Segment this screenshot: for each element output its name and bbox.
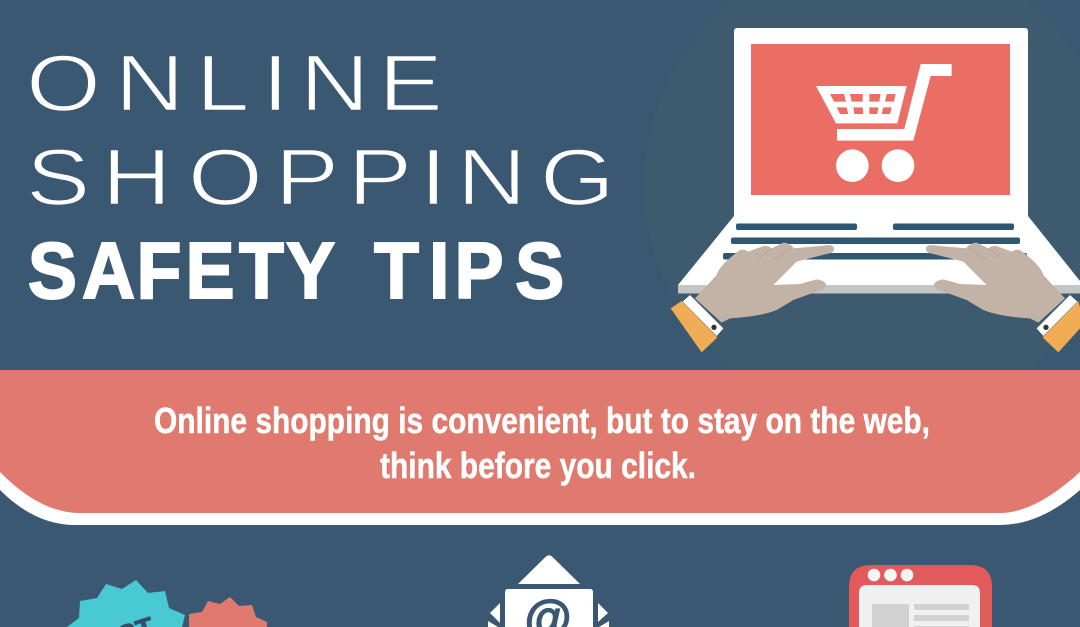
- laptop screen: [751, 44, 1010, 195]
- banner coral fill: [0, 370, 1080, 513]
- icon: badges: [67, 580, 267, 627]
- envelope flap: [518, 555, 580, 584]
- browser buttons: [868, 569, 913, 581]
- keyboard keys: [723, 224, 1027, 260]
- coral badge: [189, 597, 267, 627]
- teal badge: [67, 580, 185, 627]
- title: [26, 38, 615, 316]
- banner line 1: Online shopping is convenient, but to stay on the web,: [154, 400, 930, 441]
- laptop lid: [734, 28, 1028, 218]
- laptop keyboard deck: [678, 216, 1080, 293]
- title line: SAFETY TIPS: SAFETY TIPS: [28, 226, 564, 316]
- laptop front edge: [678, 285, 1080, 294]
- banner: [0, 370, 1080, 525]
- banner white outline: [0, 370, 1080, 525]
- laptop illustration: [644, 0, 1080, 421]
- envelope letter: [505, 589, 593, 627]
- backdrop circle: [644, 0, 1080, 421]
- banner line 2: think before you click.: [380, 445, 696, 486]
- banner message: [154, 400, 930, 486]
- right hand with cuff: [926, 243, 1080, 352]
- browser frame: [849, 565, 992, 627]
- icon: email envelope: [488, 555, 609, 627]
- envelope side folds: [488, 603, 609, 627]
- icon: shopping cart: [816, 64, 952, 182]
- title line: ONLINE: ONLINE: [26, 38, 443, 128]
- page image placeholder: [872, 604, 909, 627]
- icon: browser window: [849, 565, 992, 627]
- left hand with cuff: [671, 243, 834, 352]
- title line: SHOPPING: SHOPPING: [26, 132, 615, 222]
- page text lines: [914, 604, 969, 627]
- browser page: [859, 585, 980, 627]
